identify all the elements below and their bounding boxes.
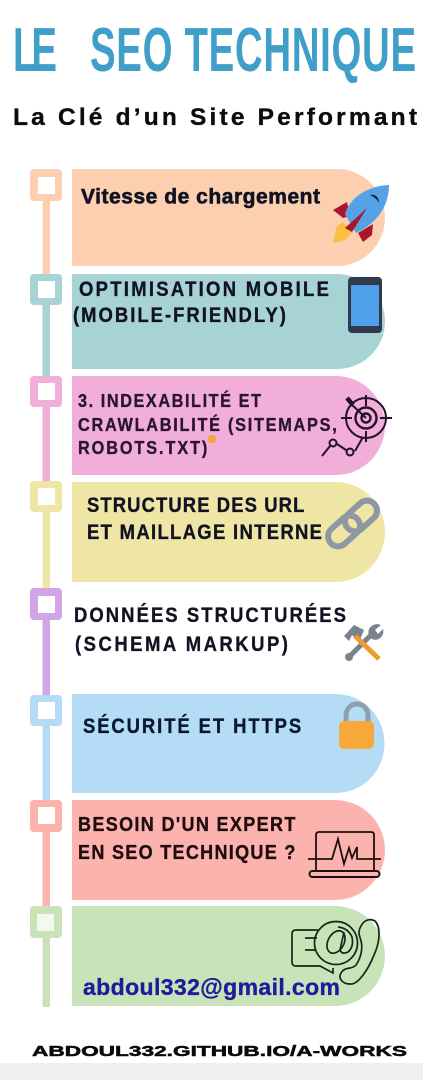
title: SEO TECHNIQUE xyxy=(90,15,416,84)
panel: contact: abdoul332@gmail.com xyxy=(83,974,340,1000)
subtitle: La Clé d’un Site Performant xyxy=(13,104,417,131)
panel: structure des url: STRUCTURE DES URL xyxy=(87,494,304,517)
panel: indexabilité et crawlabilité: ROBOTS.TXT) xyxy=(78,437,207,458)
website footer: ABDOUL332.GITHUB.IO/A-WORKS xyxy=(32,1044,407,1060)
panel: données structurées: (SCHEMA MARKUP) xyxy=(75,633,288,656)
timeline marker 2 xyxy=(30,274,62,380)
title: LE xyxy=(13,15,57,84)
panel: optimisation mobile: (MOBILE-FRIENDLY) xyxy=(73,304,286,327)
panel: sécurité et https xyxy=(72,694,384,793)
panel: contact xyxy=(72,906,385,1006)
timeline marker 7 xyxy=(30,800,62,911)
panel: structure des url xyxy=(72,482,385,582)
timeline marker 5 xyxy=(30,588,62,699)
icon: smartphone xyxy=(348,277,382,333)
panel: besoin d'un expert: EN SEO TECHNIQUE ? xyxy=(78,842,295,864)
panel: vitesse de chargement: Vitesse de chargement xyxy=(81,186,320,208)
panel: indexabilité et crawlabilité xyxy=(72,376,392,475)
timeline marker 1 xyxy=(30,169,62,277)
timeline marker 6 xyxy=(30,695,62,805)
icon: hammer and wrench xyxy=(344,624,383,661)
panel: optimisation mobile xyxy=(72,274,385,369)
icon: laptop with pulse xyxy=(308,832,381,877)
panel: indexabilité et crawlabilité: 3. INDEXABILITÉ ET xyxy=(78,390,261,411)
icon: chain link xyxy=(324,497,381,550)
orange dot xyxy=(208,435,216,443)
panel: vitesse de chargement xyxy=(72,169,389,266)
panel: données structurées: DONNÉES STRUCTURÉES xyxy=(74,603,346,627)
panel: structure des url: ET MAILLAGE INTERNE xyxy=(87,521,322,544)
panel: indexabilité et crawlabilité: CRAWLABILITÉ (SITEMAPS, xyxy=(78,414,337,435)
icon: message and phone xyxy=(292,920,379,984)
timeline marker 8 xyxy=(30,906,62,1007)
icon: padlock xyxy=(339,704,374,749)
bottom bar xyxy=(0,1063,423,1080)
icon: rocket xyxy=(333,185,389,243)
timeline marker 3 xyxy=(30,376,62,486)
panel: sécurité et https: SÉCURITÉ ET HTTPS xyxy=(83,714,301,738)
icon: target and graph xyxy=(322,395,392,456)
panel: besoin d'un expert xyxy=(72,800,385,900)
panel: besoin d'un expert: BESOIN D'UN EXPERT xyxy=(78,814,296,836)
panel: données structurées xyxy=(74,603,383,661)
timeline marker 4 xyxy=(30,481,62,592)
panel: optimisation mobile: OPTIMISATION MOBILE xyxy=(79,278,329,301)
